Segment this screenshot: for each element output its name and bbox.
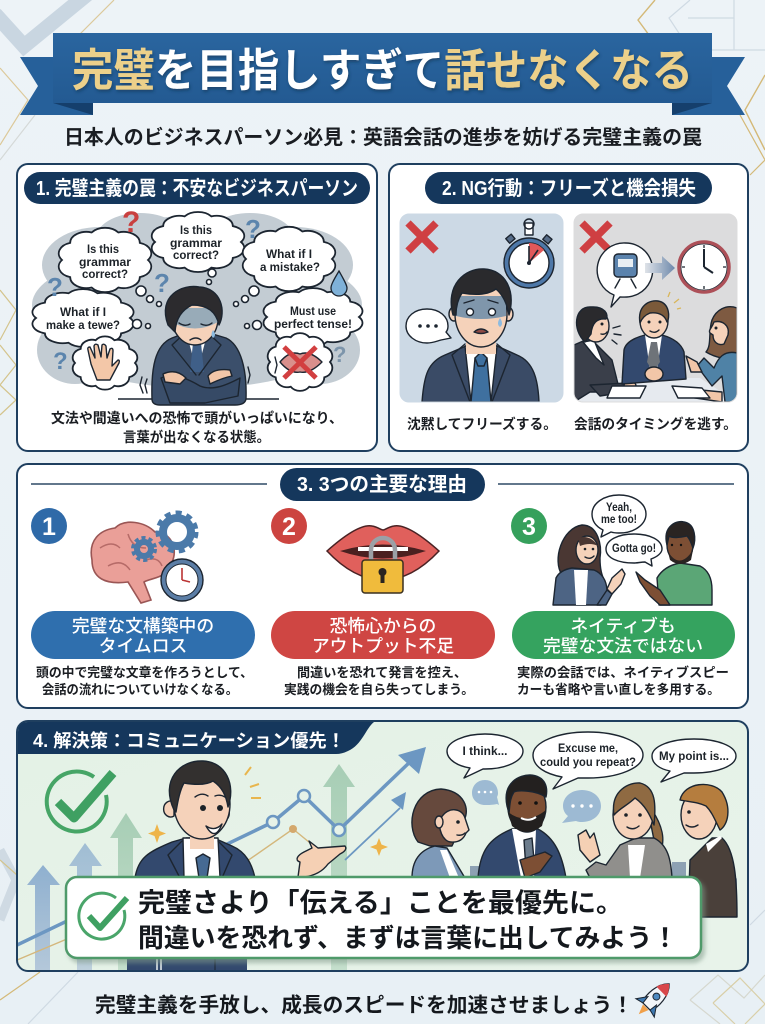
heading 2 [425,172,712,204]
panel 4: solution [17,721,748,971]
bubble: yeah me too: me too! [601,512,637,526]
icon: red cross [582,223,610,251]
thought bubbles: Is this [180,223,212,237]
speech bubble: my point: My point is... [659,749,729,763]
smiling business person [127,761,346,971]
title text: 完璧を目指しすぎて話せなくなる [72,45,693,96]
icon: large green check [47,772,113,832]
thought bubbles [32,212,362,391]
icon: small chat bubbles [472,780,601,823]
label 1: 完璧な文構築中の [72,616,214,636]
caption 1 [51,410,343,445]
reason 2 [271,508,495,697]
speech bubble: silence [406,309,451,343]
callout text [138,888,678,953]
description 1: 頭の中で完璧な文章を作ろうとして、 [36,665,253,680]
growth arrows [27,764,355,971]
icon: wall clock [679,242,729,292]
panel 2: NG behaviour [389,164,748,451]
icon: question marks: ? [333,342,346,367]
heading 3: 3. 3つの主要な理由 [297,473,467,496]
callout [66,877,701,958]
icon: red cross [408,223,436,251]
thought bubbles: correct? [173,248,219,262]
heading 3 [280,468,485,501]
label 3: 完璧な文法ではない [543,636,703,656]
discussion group [412,775,737,917]
colleague right [680,307,737,402]
bubble: yeah me too [592,495,646,537]
thought bubbles: a mistake? [260,260,320,274]
speech bubble: I think: I think... [462,744,508,758]
frozen business person [422,269,539,402]
description 2: 実践の機会を自ら失ってしまう。 [284,682,474,697]
illustration: native speakers talking [553,522,712,605]
caption 1: 文法や間違いへの恐怖で頭がいっぱいになり、 [51,410,343,426]
scene: freeze [400,214,563,402]
thought bubbles: What if I [266,247,312,261]
heading 1: 1. 完璧主義の罠：不安なビジネスパーソン [36,177,358,200]
caption 1: 言葉が出なくなる状態。 [123,429,270,445]
thought bubbles: grammar [79,255,131,269]
description 2: 間違いを恐れて発言を控え、 [297,665,467,680]
speech bubble: my point [652,739,736,782]
icon: arrow to clock [645,256,675,280]
line chart [17,747,426,960]
icon: question marks: ? [245,214,261,244]
panel 3: three main reasons [17,464,748,708]
speech bubble: excuse me: Excuse me, [558,741,618,755]
icon: question marks [47,206,346,375]
number 3: 3 [522,513,536,541]
heading 4 [18,722,374,754]
number 3 [511,508,547,544]
icon: brain, gears and clock [91,513,203,603]
title banner [20,33,745,115]
description 1 [36,665,253,697]
subtitle: 日本人のビジネスパーソン必見：英語会話の進歩を妨げる完璧主義の罠 [64,126,702,149]
caption 2 right: 会話のタイミングを逃す。 [574,416,737,432]
heading 4: 4. 解決策：コミュニケーション優先！ [33,731,345,751]
bubble: gotta go: Gotta go! [612,541,656,555]
heading 1 [24,172,370,204]
number 2: 2 [282,513,296,541]
thought bubbles: Is this [87,242,119,256]
anxious business person [140,287,277,405]
speech bubble: I think [447,734,523,778]
worry cloud background [32,213,362,388]
documents on table [607,386,710,398]
thought bubbles: make a tewe? [46,318,120,332]
colleague left [574,307,636,402]
icon: rocket [630,975,678,1023]
speech bubble: train [597,243,653,307]
colleague woman grey jacket [578,783,672,878]
number 1: 1 [42,513,56,541]
label 2: 恐怖心からの [330,616,436,636]
icon: stopwatch [504,219,554,288]
thought bubbles: What if I [60,305,106,319]
meeting table [578,378,724,402]
description 3: カーも省略や言い直しを多用する。 [517,682,720,697]
icon: callout check [79,893,127,939]
colleague centre [622,292,686,384]
label 2 [271,611,495,659]
icon: raised hand [88,344,119,380]
number 1 [31,508,67,544]
speech bubble: excuse me: could you repeat? [540,755,636,769]
callout text: 間違いを恐れず、まずは言葉に出してみよう！ [138,923,678,953]
label 2: アウトプット不足 [312,636,454,656]
speech bubble: excuse me [533,732,643,789]
label 1: タイムロス [99,636,187,656]
icon: sparkles [148,824,388,856]
description 3: 実際の会話では、ネイティブスピー [517,665,729,680]
thought bubbles: Must use [290,304,336,318]
reason 1 [31,508,255,697]
bubble: gotta go [606,534,662,566]
description 1: 会話の流れについていけなくなる。 [42,682,238,697]
number 2 [271,508,307,544]
colleague man tan hair [680,784,737,917]
bubble: yeah me too: Yeah, [606,500,632,514]
icon: question marks: ? [122,206,140,239]
scene: missed timing [574,214,737,402]
colleague man beard [478,775,566,878]
icon: sweat drop [331,271,347,296]
thought bubbles: correct? [82,267,128,281]
callout text: 完璧さより「伝える」ことを最優先に。 [138,888,623,918]
caption 2 left: 沈黙してフリーズする。 [407,416,557,432]
icon: crossed-out lips [280,347,322,378]
icon: locked lips [327,526,439,593]
label 1 [31,611,255,659]
reason 3 [511,495,735,697]
description 2 [284,665,474,697]
description 3 [517,665,729,697]
icon: question marks: ? [47,272,63,302]
thought bubbles: perfect tense! [274,317,352,331]
icon: question marks: ? [53,348,68,375]
icon: question marks: ? [154,268,170,298]
colleague woman blue jacket [412,789,469,878]
heading 2: 2. NG行動：フリーズと機会損失 [442,176,696,200]
label 3 [512,611,735,659]
thought bubbles: grammar [170,236,222,250]
label 3: ネイティブも [570,615,676,636]
panel 1: perfectionism trap [17,164,377,451]
footer message: 完璧主義を手放し、成長のスピードを加速させましょう！ [95,993,633,1017]
